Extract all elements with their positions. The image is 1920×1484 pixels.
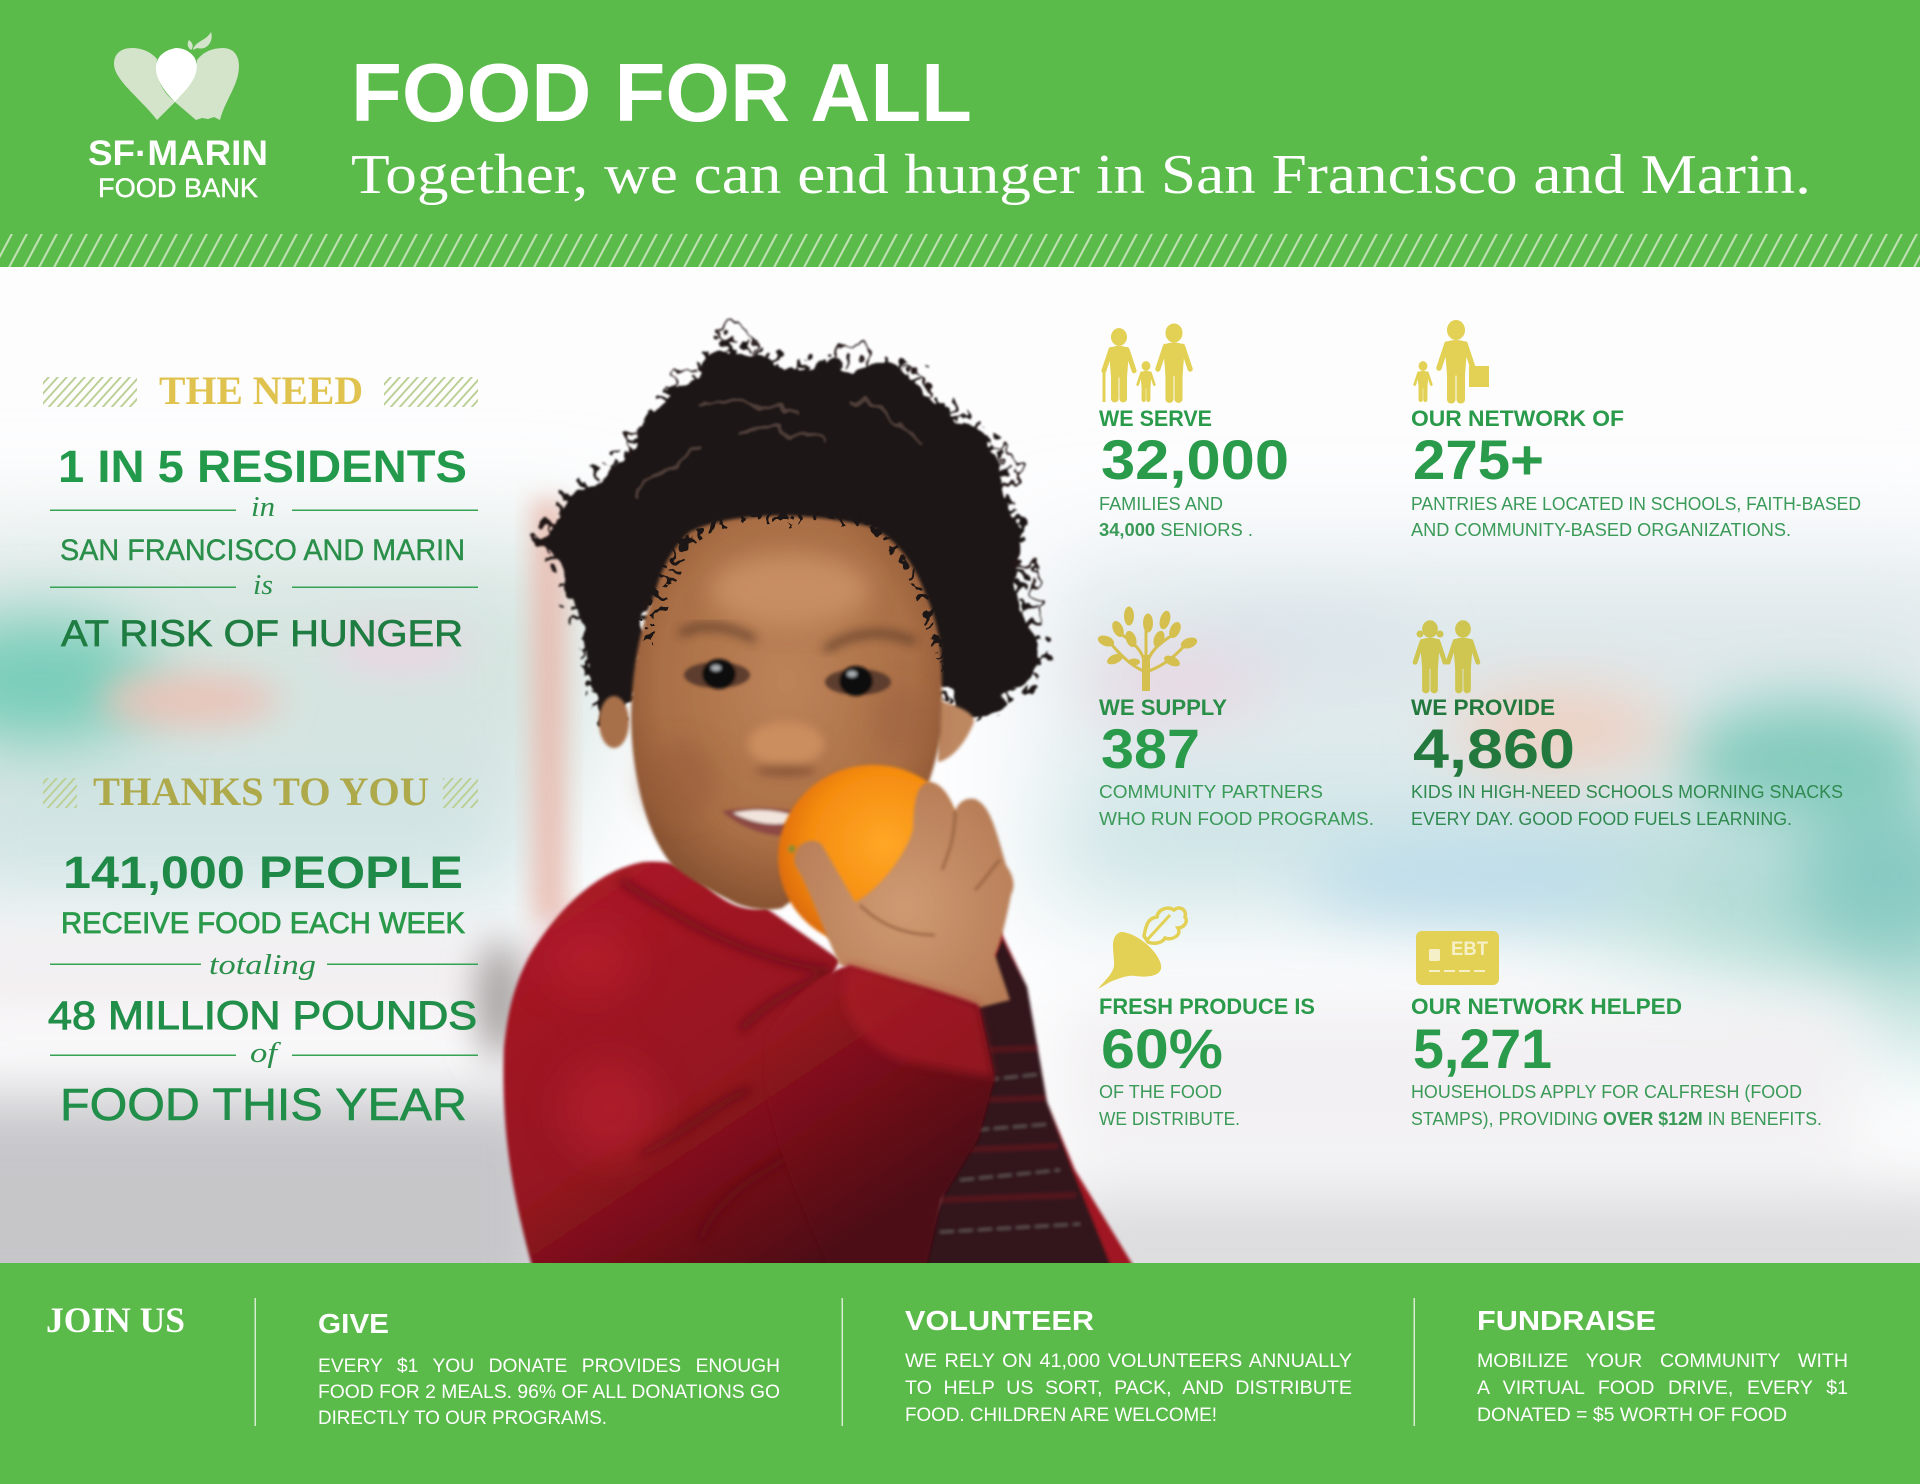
stat: 48 million pounds: 48 MILLION POUNDS	[48, 994, 477, 1038]
header band	[0, 0, 1920, 267]
column: give: FOOD FOR 2 MEALS. 96% OF ALL DONATIONS GO	[318, 1382, 780, 1403]
stripe block left	[43, 778, 77, 808]
icon: tree	[1096, 606, 1199, 691]
line: food this year: FOOD THIS YEAR	[60, 1079, 467, 1130]
child photo illustration	[503, 323, 1136, 1270]
icon: two children	[1415, 621, 1478, 693]
icon: family	[1104, 324, 1190, 402]
stat: our network	[1411, 320, 1861, 540]
hand	[794, 782, 1013, 1008]
stat: we provide: 4,860	[1413, 717, 1575, 780]
red strip and plaid vest	[915, 930, 1136, 1270]
stat: we serve: WE SERVE	[1099, 406, 1212, 431]
stat: fresh produce: OF THE FOOD	[1099, 1082, 1222, 1102]
stat: fresh produce	[1098, 908, 1315, 1129]
stat: we serve: FAMILIES AND	[1099, 494, 1223, 514]
heading: the need: THE NEED	[159, 368, 363, 413]
icon: EBT card	[1416, 931, 1499, 985]
column: give: GIVE	[318, 1308, 389, 1339]
stat: we supply	[1096, 606, 1374, 829]
column: volunteer: VOLUNTEER	[905, 1305, 1094, 1336]
orange	[776, 763, 956, 940]
stat: we provide: KIDS IN HIGH-NEED SCHOOLS MORNING SNACKS	[1411, 782, 1843, 802]
footer band	[0, 1263, 1920, 1484]
stat: fresh produce: WE DISTRIBUTE.	[1099, 1109, 1240, 1129]
line: receive food each week: RECEIVE FOOD EACH WEEK	[61, 907, 465, 940]
column: fundraise: DONATED = $5 WORTH OF FOOD	[1477, 1405, 1787, 1426]
stripe block right	[384, 377, 478, 407]
column: fundraise	[1477, 1305, 1848, 1426]
stat: 141,000 people: 141,000 PEOPLE	[63, 847, 463, 898]
stat: our network: AND COMMUNITY-BASED ORGANIZATIONS.	[1411, 520, 1791, 540]
stat: fresh produce: FRESH PRODUCE IS	[1099, 994, 1315, 1019]
eyes	[684, 659, 891, 696]
stat: our network helped	[1411, 931, 1822, 1129]
face	[631, 516, 942, 910]
column: volunteer: TO HELP US SORT, PACK, AND DISTRIBUTE	[905, 1378, 1352, 1399]
column: volunteer: FOOD. CHILDREN ARE WELCOME!	[905, 1405, 1217, 1426]
hair fringe	[645, 514, 945, 670]
column: give: DIRECTLY TO OUR PROGRAMS.	[318, 1408, 607, 1429]
stat: we supply: COMMUNITY PARTNERS	[1099, 782, 1323, 802]
icon: adult, child and bag	[1415, 320, 1489, 403]
stat: we provide: EVERY DAY. GOOD FOOD FUELS LEARNING.	[1411, 809, 1792, 829]
stat: our network: 275+	[1413, 428, 1544, 491]
column: give: EVERY $1 YOU DONATE PROVIDES ENOUGH	[318, 1356, 780, 1377]
stat: we serve: 34,000 SENIORS .	[1099, 520, 1253, 540]
stat: our network: OUR NETWORK OF	[1411, 406, 1624, 431]
column: give	[318, 1308, 780, 1429]
sleeve	[770, 963, 995, 1220]
connector: is: is	[253, 570, 273, 601]
heading: thanks to you: THANKS TO YOU	[93, 769, 429, 814]
logo: SF-Marin Food Bank: FOOD BANK	[98, 173, 258, 203]
photo background	[0, 316, 1920, 1263]
nose	[748, 722, 824, 775]
ears	[599, 696, 974, 762]
stat: we supply: 387	[1101, 717, 1200, 780]
sweater	[503, 862, 994, 1270]
stripe block left	[43, 377, 137, 407]
title: FOOD FOR ALL	[351, 46, 972, 139]
mouth	[722, 808, 795, 836]
logo: SF-Marin Food Bank	[88, 32, 268, 203]
line: San Francisco and Marin: SAN FRANCISCO AND MARIN	[60, 534, 465, 567]
stat: fresh produce: 60%	[1101, 1017, 1223, 1080]
stat: we provide	[1411, 621, 1843, 829]
stat: we provide: WE PROVIDE	[1411, 695, 1555, 720]
icon: EBT card: EBT	[1451, 939, 1488, 960]
stat: we supply: WHO RUN FOOD PROGRAMS.	[1099, 809, 1374, 829]
subtitle: Together, we can end hunger in San Francisco and Marin.	[351, 144, 1811, 206]
stat: our network helped: HOUSEHOLDS APPLY FOR CALFRESH (FOOD	[1411, 1082, 1802, 1102]
heading: join us: JOIN US	[46, 1300, 185, 1340]
panel: thanks to you	[43, 769, 478, 1130]
stripe block right	[443, 778, 478, 808]
stat: we serve: 32,000	[1101, 428, 1289, 491]
panel: the need	[43, 368, 478, 654]
column: volunteer: WE RELY ON 41,000 VOLUNTEERS ANNUALLY	[905, 1351, 1352, 1372]
icon: beet	[1098, 908, 1186, 989]
logo: SF-Marin Food Bank: SF·MARIN	[88, 134, 268, 173]
hair back and curls	[539, 323, 1039, 720]
stat: our network helped: OUR NETWORK HELPED	[1411, 994, 1682, 1019]
column: volunteer	[905, 1305, 1352, 1426]
connector: totaling: totaling	[209, 950, 316, 981]
stat: our network helped: 5,271	[1413, 1017, 1552, 1080]
stat: our network: PANTRIES ARE LOCATED IN SCHOOLS, FAITH-BASED	[1411, 494, 1861, 514]
stat: 1 in 5 residents: 1 IN 5 RESIDENTS	[58, 441, 467, 492]
column: fundraise: MOBILIZE YOUR COMMUNITY WITH	[1477, 1351, 1848, 1372]
stat: we supply: WE SUPPLY	[1099, 695, 1227, 720]
column: fundraise: FUNDRAISE	[1477, 1305, 1656, 1336]
line: at risk of hunger: AT RISK OF HUNGER	[61, 613, 463, 654]
stat: we serve	[1099, 324, 1289, 540]
stat: our network helped: STAMPS), PROVIDING OVER $12M IN BENEFITS.	[1411, 1109, 1822, 1129]
connector: in: in	[251, 492, 275, 523]
column: fundraise: A VIRTUAL FOOD DRIVE, EVERY $1	[1477, 1378, 1848, 1399]
brows	[680, 627, 915, 650]
connector: of: of	[250, 1038, 281, 1069]
